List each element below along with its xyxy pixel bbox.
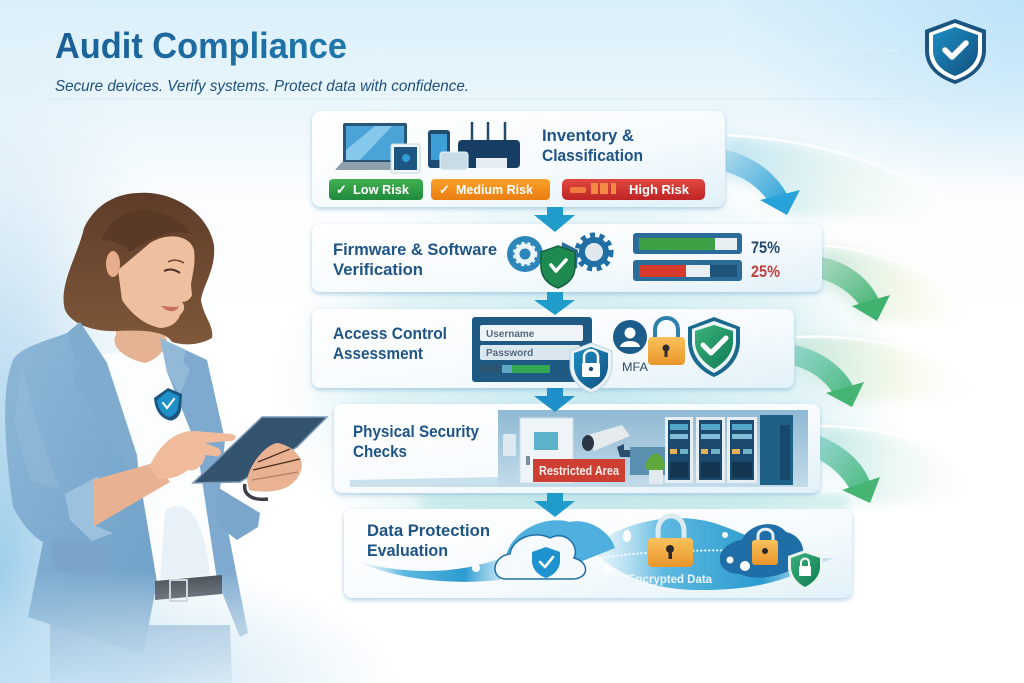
header band — [50, 50, 960, 99]
panel: firmware and software verification — [312, 224, 822, 292]
door — [520, 418, 573, 483]
arrow: step 1 to 2 — [534, 207, 575, 232]
badge: medium risk — [431, 179, 550, 200]
data heading: Data Protection — [367, 521, 490, 540]
pointing hand — [150, 431, 236, 479]
panel: physical security checks — [334, 404, 820, 493]
face — [118, 236, 195, 328]
ear — [106, 251, 120, 277]
sign: restricted area — [533, 459, 625, 482]
sign: restricted area: Restricted Area — [539, 464, 620, 478]
icon: header shield — [925, 19, 986, 84]
inventory heading: Inventory & — [542, 126, 634, 145]
icon: gears and shield — [507, 235, 611, 288]
neck — [114, 330, 167, 363]
tablet — [193, 417, 327, 483]
plant — [646, 453, 665, 470]
physical heading: Checks — [353, 442, 407, 461]
person — [5, 193, 327, 683]
icon: cloud with shield — [495, 520, 615, 579]
arrow: step 4 to 5 — [534, 493, 575, 517]
badge: medium risk: ✓ — [439, 182, 450, 197]
inventory heading: Classification — [542, 146, 643, 165]
firmware heading: Firmware & Software — [333, 240, 497, 259]
icon: large padlock — [648, 516, 693, 567]
icon: router and printer — [458, 122, 520, 168]
belt — [155, 575, 222, 600]
login form: Username — [486, 329, 535, 340]
arrow: curved 2 — [822, 257, 890, 321]
arrow: step 2 to 3 — [534, 292, 575, 315]
forearm — [93, 462, 170, 527]
badge: low risk: ✓ — [336, 182, 347, 197]
server racks — [665, 415, 793, 485]
firmware heading: Verification — [333, 260, 423, 279]
panel: data protection evaluation — [344, 509, 852, 598]
hair back — [64, 193, 214, 344]
access heading: Access Control — [333, 324, 447, 343]
icon: gold padlock — [648, 318, 685, 365]
inventory heading — [542, 126, 643, 165]
login form: Password — [486, 348, 533, 359]
badge: high risk: High Risk — [629, 182, 690, 197]
data heading: Evaluation — [367, 541, 448, 560]
data heading — [367, 521, 490, 560]
trousers — [50, 625, 232, 683]
icon: lock shield — [570, 343, 612, 393]
jacket right — [160, 338, 248, 637]
arrow: curved 3 — [795, 345, 864, 407]
icon: dark cloud — [720, 524, 803, 578]
badge: low risk: Low Risk — [353, 182, 410, 197]
physical heading: Physical Security — [353, 422, 479, 441]
access heading: Assessment — [333, 344, 423, 363]
firmware heading — [333, 240, 497, 279]
arrow: step 3 to 4 — [534, 388, 575, 412]
login form — [472, 317, 592, 382]
icon: laptop — [335, 123, 407, 170]
icon: small tablet — [391, 144, 420, 173]
holding hand — [247, 443, 302, 492]
progress bar 75 percent — [633, 233, 780, 257]
physical heading — [353, 422, 479, 461]
progress bar 25 percent — [633, 260, 780, 281]
curved arrow washes — [726, 135, 1000, 505]
watch — [245, 484, 268, 499]
icon: MFA user: MFA — [622, 360, 648, 374]
panel: inventory and classification — [312, 111, 725, 207]
badge: medium risk: Medium Risk — [456, 182, 534, 197]
icon: phone — [428, 130, 450, 168]
icon: green shield — [688, 317, 740, 377]
shirt — [102, 352, 162, 580]
progress bar 25 percent: 25% — [751, 262, 780, 281]
panel: access control assessment — [312, 309, 794, 393]
title: Audit Compliance — [55, 25, 347, 66]
icon: small device — [440, 152, 468, 170]
camera — [584, 425, 630, 451]
label: encrypted data: Encrypted Data — [628, 572, 712, 586]
jacket left — [5, 322, 157, 655]
icon: MFA user — [613, 320, 648, 374]
icon: small padlock — [752, 529, 778, 565]
arrow: curved 1 — [726, 150, 800, 215]
icon: green lock shield — [788, 550, 823, 590]
progress bar 75 percent: 75% — [751, 238, 780, 257]
access heading — [333, 324, 447, 363]
data stream wave — [358, 518, 835, 590]
badge: high risk — [562, 179, 705, 200]
arrow: curved 4 — [820, 436, 880, 503]
hair front — [102, 210, 192, 252]
subtitle: Secure devices. Verify systems. Protect data with confidence. — [55, 78, 469, 95]
badge: low risk — [329, 179, 423, 200]
badge shield — [154, 388, 182, 421]
facility scene — [350, 410, 808, 487]
rolled cuff — [65, 476, 113, 541]
